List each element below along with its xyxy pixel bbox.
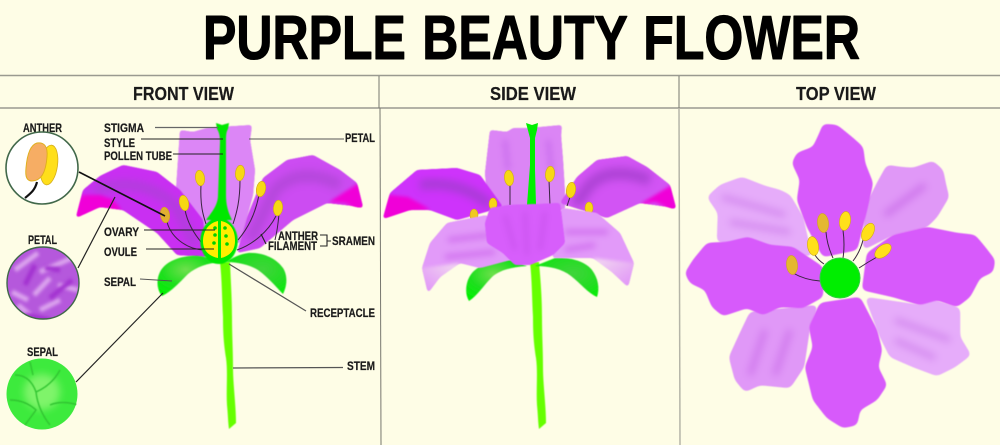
front left petal [422,215,515,293]
labels: front view callouts: ANTHER [278,229,318,243]
panel: front view flower [70,123,368,429]
labels: front view callouts: OVULE [104,245,137,259]
sepal right [226,253,286,294]
dark petal top [792,124,873,257]
centre: receptacle [820,258,860,298]
labels: front view callouts: SRAMEN [332,234,375,248]
style and stigma [526,123,538,205]
light petal upper left [707,177,812,257]
callout line: petal [78,197,115,268]
light petal lower right [865,297,971,376]
back petal [176,125,255,243]
anthers [470,166,593,221]
stem [220,262,236,429]
labels: front view callouts: OVARY [104,225,139,239]
stem [530,262,546,429]
filaments [167,180,279,250]
ovary chambers [203,221,235,258]
anthers [159,165,283,223]
sepal left [158,256,220,296]
inset: anther [6,121,78,204]
title: PURPLE BEAUTY FLOWER [203,4,860,73]
sepal left [466,260,527,301]
filaments [793,230,877,281]
ovules [212,226,229,246]
front right petal [550,208,634,287]
left petal [378,168,503,222]
labels: front view callouts: PETAL [345,131,375,145]
callout line: sepal [76,293,163,382]
heading: top view: TOP VIEW [796,84,876,104]
callout line: anther [79,172,165,216]
light petal lower left [729,305,818,392]
labels: front view callouts: POLLEN TUBE [104,149,172,163]
labels: front view callouts: FILAMENT [268,239,318,253]
labels: front view callouts: SEPAL [104,275,136,289]
panel: top view flower [685,124,995,428]
labels: front view callouts: RECEPTACLE [310,306,375,320]
front centre petal [485,203,565,265]
sepal right [535,258,598,297]
left petal [70,165,207,257]
dark petal left [685,237,823,316]
labels: front view callouts: STYLE [104,136,135,150]
back petal [485,125,565,210]
pistil: stigma, style and ovary [200,123,238,264]
inset: petal [7,233,79,320]
inset: sepal [6,345,78,430]
inset: petal: PETAL [28,233,57,247]
labels: front view callouts [104,121,375,373]
panel: side view flower [378,123,680,429]
right petal [560,156,680,218]
filaments [510,180,570,206]
labels: front view callouts: STIGMA [104,121,144,135]
heading: front view: FRONT VIEW [133,84,234,104]
light petal upper right [863,161,949,250]
right petal [237,155,368,253]
labels: front view callouts: STEM [347,359,375,373]
anthers [786,211,894,275]
inset: anther: ANTHER [23,121,62,135]
dark petal bottom [805,297,887,428]
dark petal right [862,227,995,307]
heading: side view: SIDE VIEW [490,84,576,104]
inset: sepal: SEPAL [27,345,58,359]
